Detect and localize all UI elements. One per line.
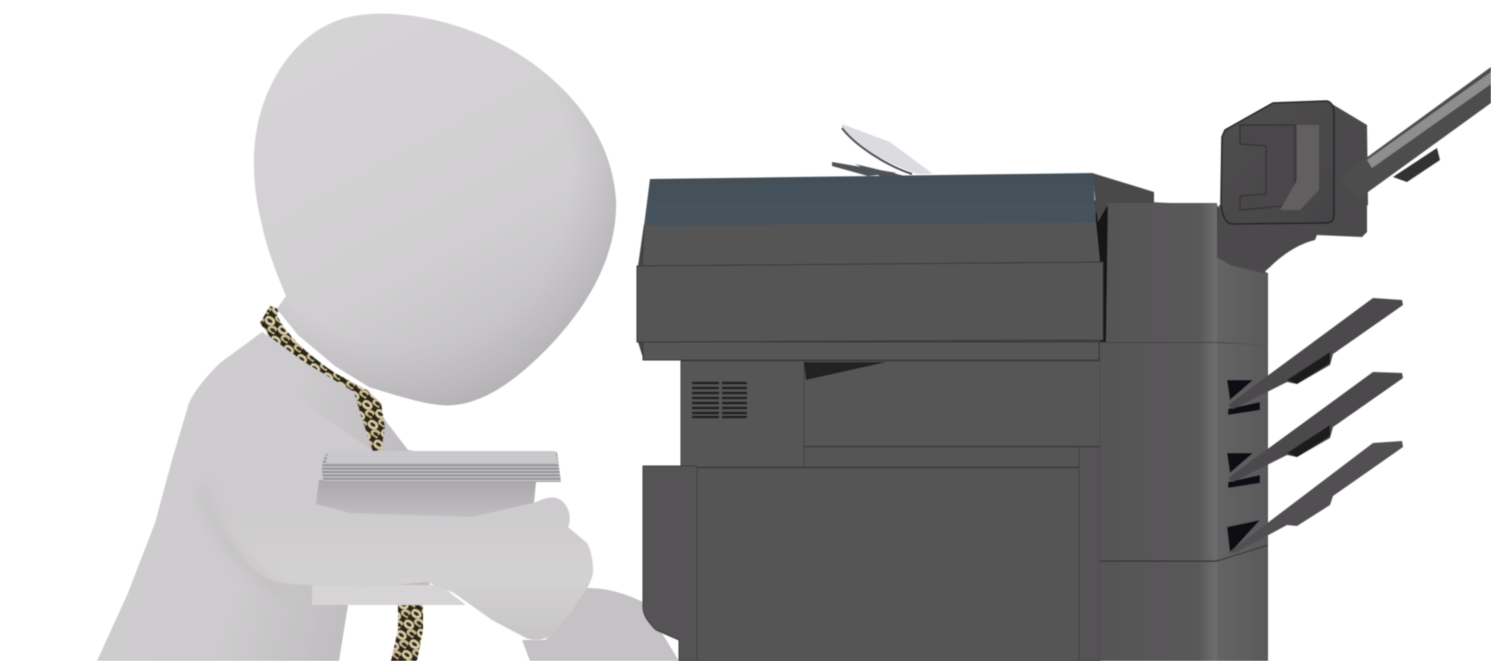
copier: tower arch <box>1217 200 1367 273</box>
copier: paper slot <box>804 362 887 380</box>
copier: finisher base side <box>1217 545 1268 661</box>
figure: hand on the copier <box>522 588 679 661</box>
copier: upper tray handle <box>1393 148 1440 182</box>
copier: feeder tray <box>832 162 905 176</box>
copier: under-lid band <box>643 342 1099 360</box>
copier: paper edge <box>842 128 912 174</box>
copier: lower front door <box>697 468 1079 661</box>
copier: backing body <box>638 200 1268 661</box>
copier: tray 1 <box>1228 298 1403 409</box>
copier: scanner glass strip <box>644 173 1096 226</box>
copier: tower side <box>1327 101 1368 222</box>
figure: lower tie <box>391 603 423 661</box>
copier: tower emblem <box>1240 125 1295 210</box>
copier: tray 3 <box>1228 441 1403 553</box>
figure: sheet under arm <box>312 585 466 605</box>
figure: stack of papers <box>316 451 561 517</box>
copier: finisher middle front <box>1100 343 1217 561</box>
copier: finisher base front <box>1100 562 1217 661</box>
copier <box>637 67 1491 661</box>
figure: torso <box>97 332 430 661</box>
figure <box>97 14 679 661</box>
copier: dark gap behind lid <box>1092 205 1110 342</box>
copier: lid side <box>1092 173 1154 222</box>
figure: arm <box>203 400 593 640</box>
copier: tower front face <box>1221 101 1334 224</box>
copier: upper finisher front <box>1106 203 1217 342</box>
copier: lid front <box>643 222 1100 266</box>
copier: middle paper output panel <box>804 361 1100 446</box>
figure: arm shadow on torso <box>200 485 285 592</box>
figure: head <box>254 14 616 405</box>
copier: door right post <box>1079 447 1100 661</box>
figure: tie <box>260 306 385 452</box>
copier: lid front band <box>637 262 1103 342</box>
copier: divider <box>1100 545 1268 561</box>
copier: tray 2 <box>1228 372 1403 482</box>
copier: upper tray highlight <box>1367 72 1491 168</box>
copier: left side panel with vent <box>681 361 804 467</box>
copier: upper output tray <box>1340 67 1491 200</box>
copier: tower emblem highlight <box>1280 125 1319 210</box>
copier: document feeder paper <box>842 124 933 174</box>
copier: left door edge <box>643 466 697 661</box>
copier: vent grille <box>692 383 747 417</box>
copier: upper finisher side <box>1217 258 1268 345</box>
copier: tray recesses <box>1227 380 1260 553</box>
copier: strip above door <box>804 447 1079 467</box>
copier: finisher middle side <box>1217 343 1268 562</box>
